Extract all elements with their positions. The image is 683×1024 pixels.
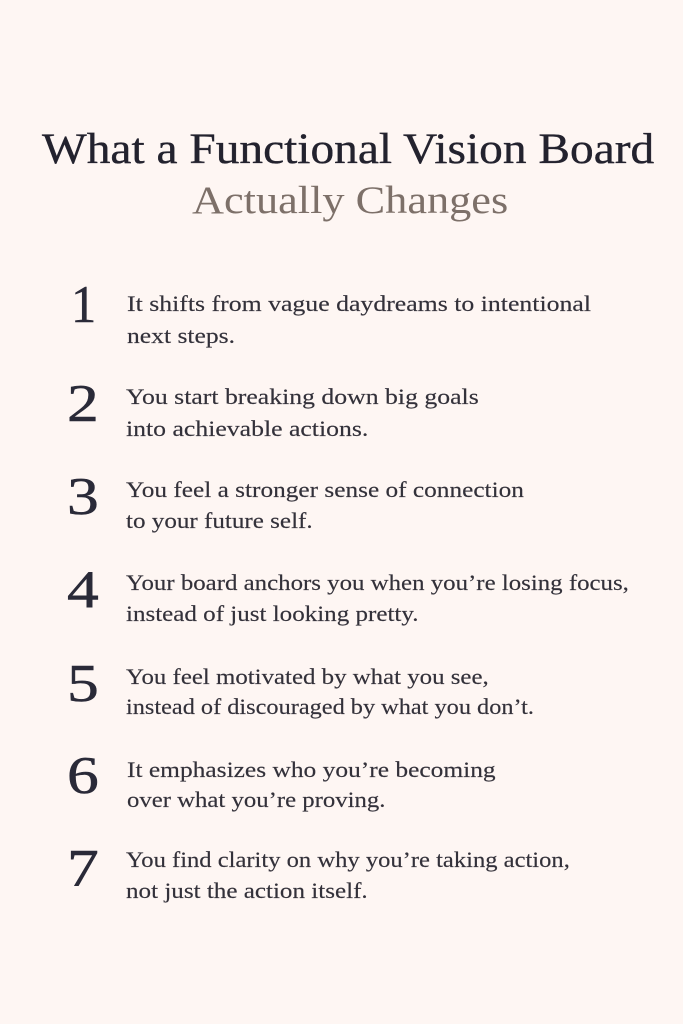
item 4 text: Your board anchors you when you’re losing focus, <box>126 570 629 595</box>
item 4 text <box>126 570 629 626</box>
title: What a Functional Vision Board <box>42 126 654 172</box>
list item 3 <box>67 468 524 533</box>
item 5 text: You feel motivated by what you see, <box>126 664 489 689</box>
item 5 text: instead of discouraged by what you don’t. <box>126 694 534 719</box>
item 4 text: instead of just looking pretty. <box>126 601 419 626</box>
item 2 text: You start breaking down big goals <box>126 384 479 409</box>
subtitle: Actually Changes <box>192 179 508 222</box>
number 1: 1 <box>71 276 96 334</box>
item 3 text: You feel a stronger sense of connection <box>126 477 524 502</box>
item 1 text: next steps. <box>127 323 235 348</box>
item 3 text <box>126 477 524 533</box>
item 3 text: to your future self. <box>126 508 313 533</box>
item 1 text: It shifts from vague daydreams to intentional <box>127 291 591 316</box>
item 1 text <box>127 291 591 348</box>
item 6 text: over what you’re proving. <box>127 787 385 812</box>
number 7: 7 <box>67 840 99 898</box>
item 6 text <box>127 757 496 812</box>
item 7 text: You find clarity on why you’re taking action, <box>126 847 570 872</box>
item 7 text <box>126 847 570 903</box>
item 7 text: not just the action itself. <box>126 878 368 903</box>
item 5 text <box>126 664 534 719</box>
list item 6 <box>67 747 496 812</box>
number 2: 2 <box>67 375 99 433</box>
number 3: 3 <box>67 468 99 526</box>
number 6: 6 <box>67 747 99 805</box>
item 6 text: It emphasizes who you’re becoming <box>127 757 496 782</box>
list item 5 <box>67 655 534 719</box>
number 4: 4 <box>67 561 99 619</box>
list item 2 <box>67 375 479 441</box>
number 5: 5 <box>67 655 99 713</box>
item 2 text <box>126 384 479 441</box>
list item 1 <box>71 276 591 348</box>
list item 4 <box>67 561 629 626</box>
list item 7 <box>67 840 570 903</box>
item 2 text: into achievable actions. <box>126 416 368 441</box>
